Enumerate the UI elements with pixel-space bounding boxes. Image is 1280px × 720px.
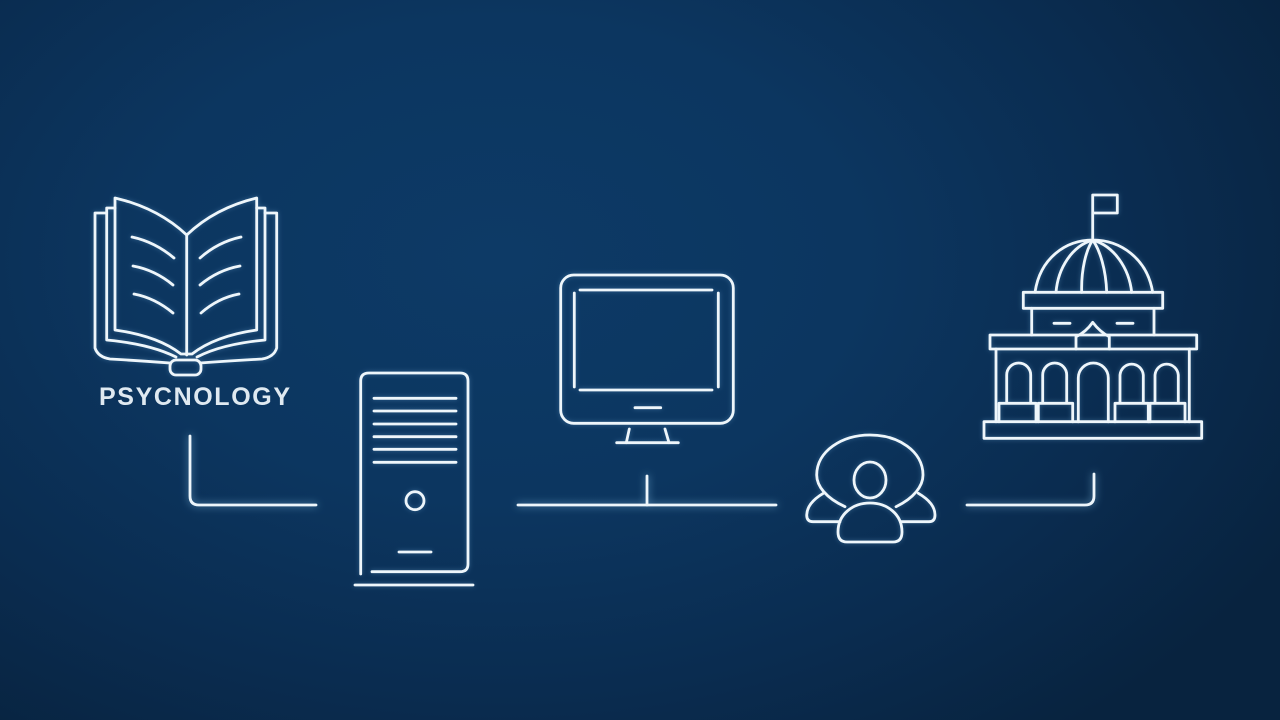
arrow: connector from book to computer tower [190,436,316,505]
icon: group of people [807,435,935,542]
heading: book label: PSYCNOLOGY [99,383,290,411]
icon: open psychology book [95,198,277,375]
icon: desktop monitor [561,275,733,443]
arrow: connector from computer tower to people, with monitor branch [518,476,776,505]
icon: computer tower [355,373,473,585]
arrow: connector from people to institution [967,474,1094,505]
icon: domed institution building [984,195,1202,438]
